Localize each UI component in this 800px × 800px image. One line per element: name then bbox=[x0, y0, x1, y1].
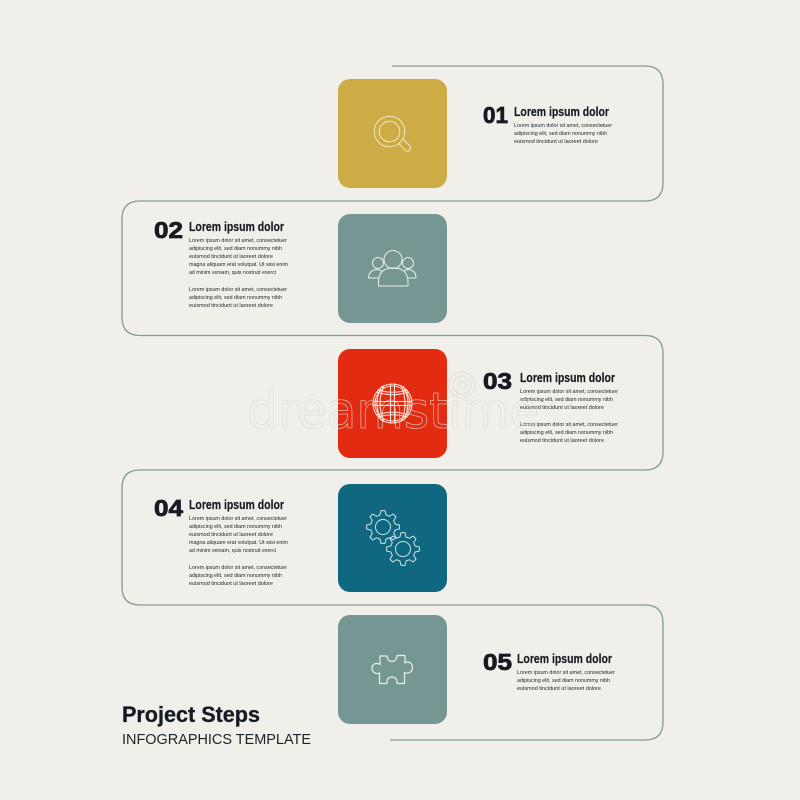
step 2 square bbox=[338, 214, 447, 323]
step 4 number: 04 bbox=[154, 495, 183, 521]
step 5 bbox=[338, 615, 615, 724]
step 1 heading: Lorem ipsum dolor bbox=[514, 105, 609, 119]
step 5 body text: adipiscing elit, sed diam nonummy nibh bbox=[517, 678, 610, 684]
step 2 body text: ad minim veniam, quis nostrud exerci bbox=[189, 270, 276, 276]
icon: gears bbox=[367, 511, 419, 565]
step 1 body text: euismod tincidunt ut laoreet dolore bbox=[514, 139, 598, 145]
step 1 bbox=[338, 79, 612, 188]
icon: globe bbox=[373, 384, 412, 423]
step 3 body text: euismod tincidunt ut laoreet dolore bbox=[520, 438, 604, 444]
step 3 heading: Lorem ipsum dolor bbox=[520, 371, 615, 385]
step 4 square bbox=[338, 484, 447, 592]
step 3 bbox=[338, 349, 618, 458]
step 4 body text: adipiscing elit, sed diam nonummy nibh bbox=[189, 524, 282, 530]
step 4 heading: Lorem ipsum dolor bbox=[189, 498, 284, 512]
step 4 body text: magna aliquam erat volutpat. Ut wisi enim bbox=[189, 540, 288, 546]
title: Project Steps bbox=[122, 702, 260, 727]
step 2 body text: euismod tincidunt ut laoreet dolore bbox=[189, 254, 273, 260]
step 1 body text bbox=[514, 123, 612, 145]
step 1 body text: Lorem ipsum dolor sit amet, consectetuer bbox=[514, 123, 612, 129]
step 2 number: 02 bbox=[154, 217, 183, 243]
subtitle: INFOGRAPHICS TEMPLATE bbox=[122, 731, 311, 748]
step 2 body text: adipiscing elit, sed diam nonummy nibh bbox=[189, 295, 282, 301]
step 5 body text: Lorem ipsum dolor sit amet, consectetuer bbox=[517, 670, 615, 676]
step 2 bbox=[154, 214, 447, 323]
step 4 body text: Lorem ipsum dolor sit amet, consectetuer bbox=[189, 516, 287, 522]
step 5 body text: euismod tincidunt ut laoreet dolore bbox=[517, 686, 601, 692]
icon: puzzle piece bbox=[372, 656, 412, 684]
step 3 square bbox=[338, 349, 447, 458]
step 2 body text: Lorem ipsum dolor sit amet, consectetuer bbox=[189, 238, 287, 244]
step 5 square bbox=[338, 615, 447, 724]
icon: magnifying glass bbox=[374, 116, 411, 151]
step 3 body text bbox=[520, 389, 618, 444]
step 3 number: 03 bbox=[483, 368, 512, 394]
step 4 body text: euismod tincidunt ut laoreet dolore bbox=[189, 532, 273, 538]
step 4 body text: Lorem ipsum dolor sit amet, consectetuer bbox=[189, 565, 287, 571]
step 2 body text: magna aliquam erat volutpat. Ut wisi enim bbox=[189, 262, 288, 268]
step 3 body text: adipiscing elit, sed diam nonummy nibh bbox=[520, 430, 613, 436]
step 1 square bbox=[338, 79, 447, 188]
step 5 number: 05 bbox=[483, 649, 512, 675]
step 3 body text: adipiscing elit, sed diam nonummy nibh bbox=[520, 397, 613, 403]
step 3 body text: euismod tincidunt ut laoreet dolore bbox=[520, 405, 604, 411]
step 4 bbox=[154, 484, 447, 592]
step 2 body text: adipiscing elit, sed diam nonummy nibh bbox=[189, 246, 282, 252]
step 3 body text: Lorem ipsum dolor sit amet, consectetuer bbox=[520, 389, 618, 395]
step 4 body text: ad minim veniam, quis nostrud exerci bbox=[189, 548, 276, 554]
step 4 body text: adipiscing elit, sed diam nonummy nibh bbox=[189, 573, 282, 579]
step 2 body text: Lorem ipsum dolor sit amet, consectetuer bbox=[189, 287, 287, 293]
step 2 heading: Lorem ipsum dolor bbox=[189, 220, 284, 234]
step 2 body text: euismod tincidunt ut laoreet dolore bbox=[189, 303, 273, 309]
icon: people bbox=[368, 250, 416, 286]
step 4 body text bbox=[189, 516, 288, 587]
connector line: serpentine path through all steps bbox=[122, 66, 663, 740]
watermark: dreamstime bbox=[247, 382, 539, 440]
step 3 body text: Lorem ipsum dolor sit amet, consectetuer bbox=[520, 422, 618, 428]
step 1 number: 01 bbox=[483, 102, 508, 128]
step 4 body text: euismod tincidunt ut laoreet dolore bbox=[189, 581, 273, 587]
step 1 body text: adipiscing elit, sed diam nonummy nibh bbox=[514, 131, 607, 137]
step 5 body text bbox=[517, 670, 615, 692]
step 5 heading: Lorem ipsum dolor bbox=[517, 652, 612, 666]
step 2 body text bbox=[189, 238, 288, 309]
